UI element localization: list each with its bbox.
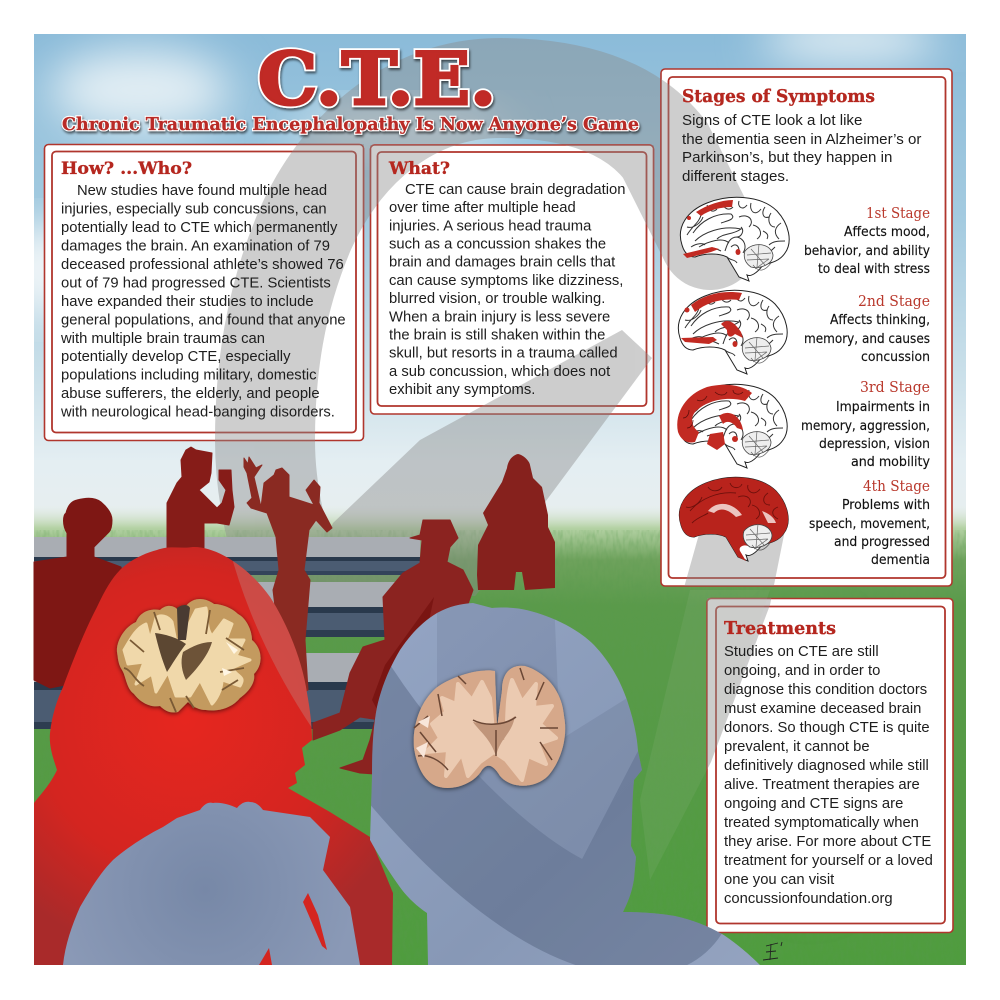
- text block: how / who: with multiple brain traumas can: [60, 331, 265, 347]
- text block: how / who: deceased professional athlete’s showed 76: [61, 257, 344, 273]
- text: stage 3: memory, aggression,: [801, 419, 930, 434]
- silhouette: seated man with hat: [313, 520, 473, 775]
- brain slice: healthy: [414, 666, 565, 788]
- title: C.T.E.: [258, 36, 496, 121]
- text block: what: can cause symptoms like dizziness,: [389, 273, 623, 289]
- text: stage 2: 2nd Stage: [858, 294, 930, 310]
- faint grey band on the grass: [640, 590, 770, 880]
- text: stage 3: [801, 380, 930, 470]
- text: stage 4: 4th Stage: [863, 479, 930, 495]
- text block: how / who: abuse sufferers, the elderly, and people: [61, 386, 320, 402]
- brain diagram: stage 2: [678, 290, 787, 374]
- blue head silhouette: [370, 603, 760, 965]
- text block: treatments: diagnose this condition doctors: [724, 682, 927, 698]
- text: stage 4: [809, 479, 930, 568]
- text block: treatments: Studies on CTE are still: [724, 644, 879, 660]
- text block: how / who: potentially develop CTE, especially: [61, 349, 291, 365]
- text block: treatments: must examine deceased brain: [724, 701, 921, 717]
- text: stage 1: behavior, and ability: [804, 244, 930, 259]
- text block: what: the brain is still shaken within the: [389, 327, 605, 343]
- text block: what: brain and damages brain cells that: [389, 255, 615, 271]
- text block: what: over time after multiple head: [389, 200, 576, 216]
- text: stage 4: dementia: [871, 553, 930, 568]
- grey symbol seen through the upper panels: [215, 79, 744, 441]
- text: stage 1: Affects mood,: [844, 225, 930, 240]
- text block: stages intro: Stages of Symptoms: [682, 86, 875, 107]
- text block: treatments: treatment for yourself or a loved: [724, 853, 933, 869]
- brain diagram: stage 1: [680, 197, 789, 281]
- text block: treatments: ongoing and CTE signs are: [724, 796, 903, 812]
- subtitle: Chronic Traumatic Encephalopathy Is Now Anyone’s Game: [62, 114, 639, 135]
- text: stage 3: depression, vision: [819, 437, 930, 452]
- panel: stages of symptoms: [661, 69, 952, 586]
- text block: stages intro: [682, 86, 921, 185]
- text block: how / who: with neurological head-banging disorders.: [60, 405, 335, 421]
- grey band seen through stages and treatments panels: [684, 534, 784, 770]
- text block: how / who: New studies have found multiple head: [77, 183, 327, 199]
- text: stage 1: [804, 206, 930, 277]
- title: C.T.E.: [258, 36, 496, 121]
- text block: what: What?: [388, 159, 450, 179]
- text: stage 2: Affects thinking,: [830, 313, 930, 328]
- brain slice: CTE damaged: [117, 599, 261, 713]
- text: stage 2: concussion: [861, 350, 930, 365]
- text block: what: blurred vision, or trouble walking.: [389, 291, 605, 307]
- text block: how / who: general populations, and found that anyone: [61, 312, 346, 328]
- text: stage 3: and mobility: [851, 455, 930, 470]
- silhouette: standing man arguing: [167, 447, 234, 548]
- text block: treatments: [724, 618, 933, 907]
- panel: how / who: [44, 144, 364, 440]
- artist signature: [763, 942, 782, 960]
- blue small silhouette: [63, 802, 360, 965]
- text block: stages intro: Parkinson’s, but they happen in: [682, 149, 892, 166]
- text block: how / who: injuries, especially sub concussions, can: [61, 202, 327, 218]
- silhouette: woman in wheelchair: [477, 454, 555, 590]
- text block: how / who: out of 79 had progressed CTE. Scientists: [61, 275, 331, 291]
- text block: treatments: alive. Treatment therapies are: [724, 777, 920, 793]
- text block: how / who: potentially lead to CTE which permanently: [61, 220, 338, 236]
- text block: treatments: donors. So though CTE is quite: [724, 720, 930, 736]
- park bench: [34, 537, 464, 729]
- text block: how / who: populations including military, domestic: [61, 368, 317, 384]
- red head silhouette: [34, 547, 393, 965]
- text: stage 2: memory, and causes: [804, 332, 930, 347]
- dark symbol band inside blue head: [371, 603, 722, 965]
- grey overlay on red head: [233, 561, 312, 727]
- red slit in the small silhouette: [259, 893, 327, 965]
- text block: what: such as a concussion shakes the: [389, 236, 606, 252]
- subtitle: Chronic Traumatic Encephalopathy Is Now Anyone’s Game: [62, 114, 639, 135]
- text: stage 1: 1st Stage: [866, 206, 930, 222]
- text block: treatments: one you can visit: [724, 872, 834, 888]
- text: stage 4: speech, movement,: [809, 517, 930, 532]
- silhouette: woman with raised hands: [244, 457, 332, 700]
- panel: treatments: [707, 598, 953, 932]
- text block: treatments: Treatments: [724, 618, 836, 639]
- text block: how / who: damages the brain. An examination of 79: [61, 238, 330, 254]
- brain diagram: stage 4: [679, 477, 788, 561]
- text block: treatments: treated symptomatically when: [724, 815, 919, 831]
- text block: stages intro: Signs of CTE look a lot like: [682, 112, 862, 129]
- large translucent grey symbol behind the figures: [215, 38, 660, 596]
- silhouette: seated man in beret: [34, 498, 130, 688]
- panel: what: [370, 145, 654, 414]
- text: stage 2: [804, 294, 930, 365]
- text block: what: exhibit any symptoms.: [389, 382, 535, 398]
- text block: what: CTE can cause brain degradation: [405, 182, 625, 198]
- text block: stages intro: the dementia seen in Alzheimer’s or: [682, 131, 921, 148]
- text block: how / who: How? ...Who?: [61, 159, 192, 179]
- text: stage 3: Impairments in: [836, 400, 930, 415]
- brain diagram: stage 3: [677, 384, 787, 468]
- text: stage 4: and progressed: [834, 535, 930, 550]
- text block: what: [388, 159, 625, 398]
- text block: treatments: they arise. For more about CTE: [724, 834, 931, 850]
- text block: stages intro: different stages.: [682, 168, 789, 185]
- text block: how / who: have expanded their studies to include: [61, 294, 314, 310]
- text block: treatments: definitively diagnosed while still: [724, 758, 929, 774]
- text: stage 3: 3rd Stage: [860, 380, 930, 396]
- text block: what: a sub concussion, which does not: [389, 364, 610, 380]
- text block: what: When a brain injury is less severe: [389, 309, 610, 325]
- text: stage 4: Problems with: [842, 498, 930, 513]
- text: stage 1: to deal with stress: [818, 262, 930, 277]
- text block: treatments: ongoing, and in order to: [724, 663, 880, 679]
- text block: treatments: prevalent, it cannot be: [724, 739, 870, 755]
- text block: what: skull, but resorts in a trauma called: [389, 346, 618, 362]
- text block: what: injuries. A serious head trauma: [389, 218, 592, 234]
- text block: treatments: concussionfoundation.org: [724, 891, 893, 907]
- text block: how / who: [60, 159, 346, 421]
